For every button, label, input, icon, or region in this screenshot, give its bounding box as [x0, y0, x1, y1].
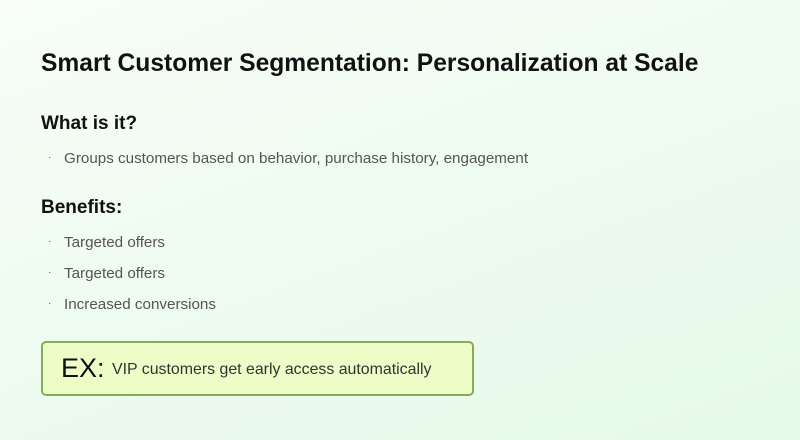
- bullet: benefit 2: Targeted offers: [64, 265, 165, 282]
- heading: benefits: Benefits:: [41, 197, 122, 218]
- bullet: definition: ·: [48, 152, 51, 163]
- callout: example: EX: VIP customers get early access automatically: [61, 353, 431, 383]
- bullet: benefit 3: ·: [48, 298, 51, 309]
- bullet: definition: Groups customers based on behavior, purchase history, engagement: [64, 150, 528, 167]
- bullet: benefit 2: ·: [48, 267, 51, 278]
- bullet: benefit 1: ·: [48, 236, 51, 247]
- heading: what is it: What is it?: [41, 113, 137, 134]
- bullet: benefit 3: Increased conversions: [64, 296, 216, 313]
- title: Smart Customer Segmentation: Personalization at Scale: [41, 50, 698, 77]
- bullet: benefit 1: Targeted offers: [64, 234, 165, 251]
- callout: example: [41, 341, 474, 396]
